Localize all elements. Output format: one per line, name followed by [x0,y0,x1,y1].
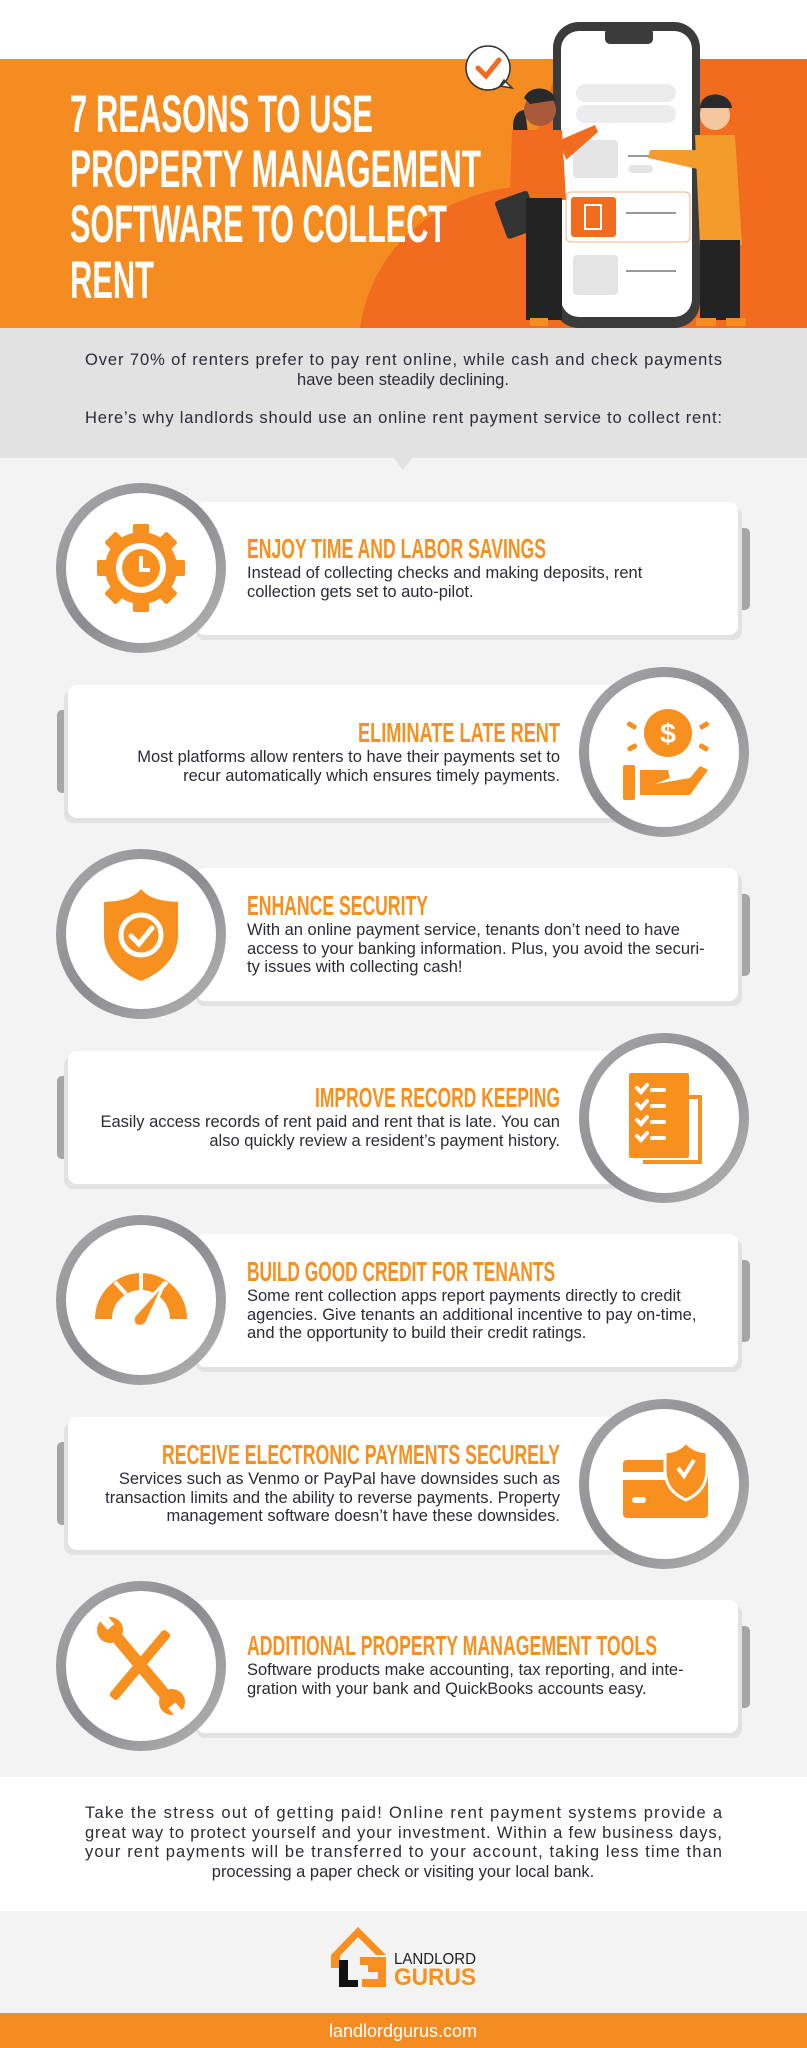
icon: shield check [104,889,178,981]
panel: card 5 build good credit: Some rent collection apps report payments directly to credit [247,1287,681,1305]
intro text band: Over 70% of renters prefer to pay rent online, while cash and check payments [85,351,722,369]
closing text: great way to protect yourself and your investment. Within a few business days, [85,1824,722,1842]
icon: gauge [95,1270,187,1326]
icon: gear clock [97,524,185,612]
panel: card 6 electronic payments: Services such as Venmo or PayPal have downsides such as [119,1470,560,1488]
closing text [0,1777,807,1911]
panel: card 2 eliminate late rent: Most platforms allow renters to have their payments set to [137,748,560,766]
icon: speech bubble check [466,46,512,90]
title: 7 REASONS TO USE [70,85,373,144]
panel: card 2 eliminate late rent [57,672,744,832]
panel: card 3 enhance security: With an online payment service, tenants don’t need to have [247,921,680,939]
title: RENT [70,251,154,310]
icon: hand with coin: $ [660,718,676,749]
footer bar: landlordgurus.com [329,2021,477,2041]
panel: card 5 build good credit: agencies. Give tenants an additional incentive to pay on-time, [247,1306,696,1324]
panel: card 7 additional tools: Software products make accounting, tax reporting, and inte- [247,1661,684,1679]
man [700,100,730,130]
title: SOFTWARE TO COLLECT [70,195,447,254]
icon: checklist [629,1073,700,1162]
panel: card 5 build good credit [61,1220,750,1380]
intro text band: have been steadily declining. [297,371,509,389]
footer bar [0,2013,807,2048]
panel: card 4 improve record keeping: IMPROVE RECORD KEEPING [315,1082,560,1113]
icon: card with shield [623,1442,708,1518]
intro text band: Here’s why landlords should use an online rent payment service to collect rent: [85,409,722,427]
panel: card 3 enhance security: ty issues with collecting cash! [247,958,463,976]
panel: card 3 enhance security: ENHANCE SECURITY [247,890,428,921]
panel: card 4 improve record keeping: Easily access records of rent paid and rent that is late. You can [100,1113,560,1131]
panel: card 4 improve record keeping: also quickly review a resident’s payment history. [209,1132,560,1150]
panel: card 2 eliminate late rent: ELIMINATE LATE RENT [358,717,560,748]
panel: card 5 build good credit: BUILD GOOD CREDIT FOR TENANTS [247,1256,555,1287]
panel: card 1 time and labor savings [61,488,750,648]
panel: card 2 eliminate late rent: recur automatically which ensures timely payments. [183,767,560,785]
panel: card 1 time and labor savings: collection gets set to auto-pilot. [247,583,474,601]
panel: card 5 build good credit: and the opportunity to build their credit ratings. [247,1324,586,1342]
closing text: Take the stress out of getting paid! Online rent payment systems provide a [85,1804,723,1822]
title [70,85,481,310]
panel: card 6 electronic payments: management software doesn’t have these downsides. [166,1507,560,1525]
icon: wrench and screwdriver [97,1613,185,1720]
panel: card 7 additional tools [61,1586,750,1746]
title: PROPERTY MANAGEMENT [70,140,481,199]
panel: card 6 electronic payments: RECEIVE ELECTRONIC PAYMENTS SECURELY [162,1439,560,1470]
panel: card 6 electronic payments: transaction limits and the ability to reverse payments. Property [105,1489,561,1507]
panel: card 3 enhance security [61,854,750,1014]
panel: card 4 improve record keeping [57,1038,744,1198]
icon: hand with coin [623,709,710,800]
logo: landlord gurus: LANDLORD [394,1951,476,1968]
header banner [0,0,807,328]
closing text: your rent payments will be transferred to your account, taking less time than [85,1843,722,1861]
logo: landlord gurus: GURUS [394,1964,476,1991]
panel: card 1 time and labor savings: Instead of collecting checks and making deposits, rent [247,564,643,582]
panel: card 1 time and labor savings: ENJOY TIME AND LABOR SAVINGS [247,533,546,564]
panel: card 7 additional tools: gration with your bank and QuickBooks accounts easy. [247,1680,647,1698]
illustration: phone with people [494,22,746,328]
logo: landlord gurus [331,1927,476,1991]
panel: card 6 electronic payments [57,1404,744,1564]
woman [513,110,530,150]
closing text: processing a paper check or visiting your local bank. [212,1863,594,1881]
panel: card 3 enhance security: access to your banking information. Plus, you avoid the securi- [247,940,705,958]
intro text band [0,328,807,470]
